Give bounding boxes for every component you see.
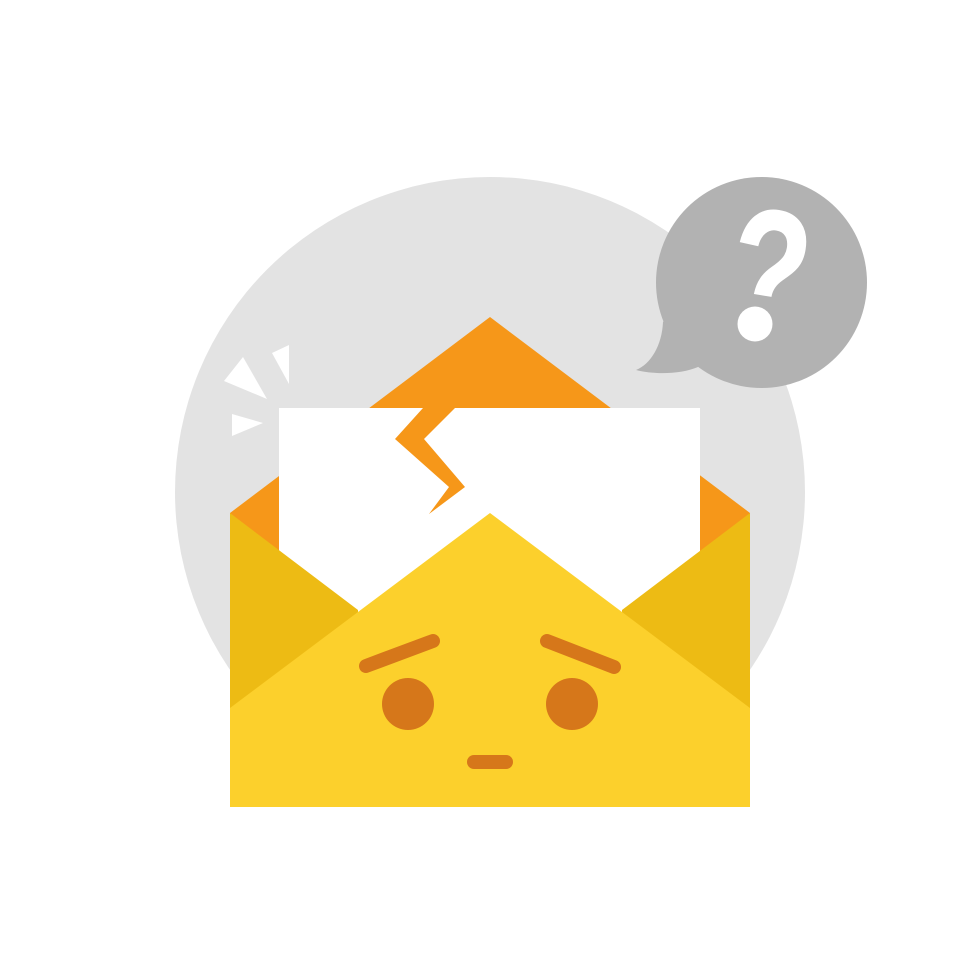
icon: speech bubble with question mark: [636, 170, 867, 388]
right side flap: [622, 513, 750, 720]
background circle: [175, 177, 805, 807]
left side flap: [230, 513, 358, 720]
icon: spark marks: [224, 345, 289, 436]
right eye: [546, 678, 598, 730]
illustration: sad open envelope with broken letter: [175, 177, 867, 807]
front pocket: [230, 513, 750, 807]
question mark: [738, 210, 806, 342]
left eye: [382, 678, 434, 730]
broken letter paper: [279, 408, 700, 640]
envelope back flap: [230, 317, 750, 600]
envelope body: [230, 513, 750, 807]
left eyebrow: [366, 641, 433, 666]
question mark: ?: [715, 170, 823, 374]
sad face: [366, 641, 614, 769]
mouth: [467, 755, 513, 769]
right eyebrow: [547, 641, 614, 667]
speech bubble: [636, 177, 867, 388]
